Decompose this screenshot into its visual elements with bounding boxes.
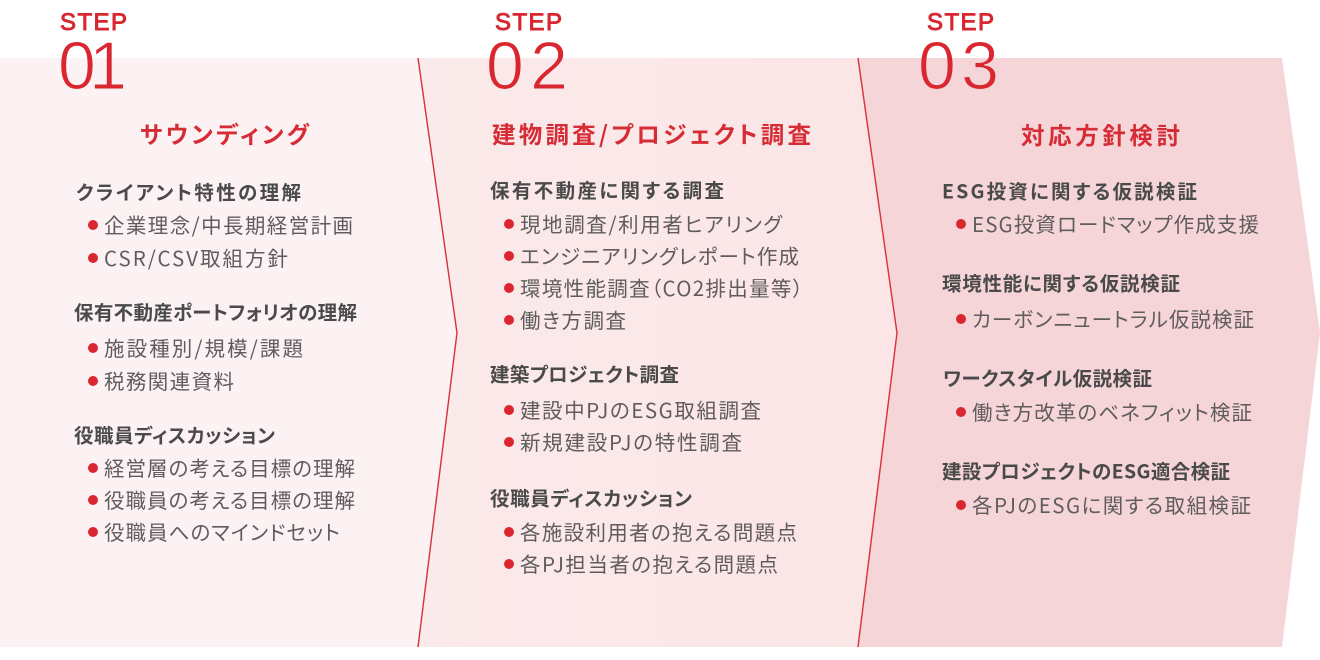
- step 1 label: STEP: [60, 9, 127, 36]
- step 1 group: discussion: 役職員へのマインドセット: [104, 516, 340, 546]
- step 1 group: discussion: [74, 420, 355, 546]
- step 2 group: real estate survey: 環境性能調査（CO2排出量等）: [520, 272, 803, 302]
- panel: step 3 background arrow: [820, 58, 1320, 647]
- step 2 group: discussion: 各施設利用者の抱える問題点: [520, 516, 797, 546]
- step 2 title: 建物調査/プロジェクト調査: [492, 116, 811, 150]
- arrow: divider between step 1 and 2: [418, 58, 457, 647]
- step 1 group: portfolio: 税務関連資料: [104, 365, 234, 395]
- step 3 group: work style: 働き方改革のベネフィット検証: [972, 396, 1252, 426]
- step 1 group: client: CSR/CSV取組方針: [104, 242, 288, 272]
- step 2 label: STEP: [495, 9, 562, 36]
- step 3 group: ESG investment: ESG投資ロードマップ作成支援: [972, 208, 1259, 238]
- step 2 group: real estate survey: [490, 174, 803, 334]
- step 3 group: work style: [943, 362, 1252, 426]
- step 1 group: client: 企業理念/中長期経営計画: [104, 209, 353, 239]
- step 2 group: project survey: 建設中PJのESG取組調査: [520, 394, 761, 424]
- step 3 group: project ESG: 建設プロジェクトのESG適合検証: [942, 456, 1230, 484]
- step 3 label: STEP: [927, 9, 994, 36]
- step 2 group: discussion: 役職員ディスカッション: [490, 482, 692, 512]
- panel: step 2 background arrow: [400, 58, 897, 647]
- step 1 group: portfolio: [74, 296, 357, 395]
- step 1 group: client: クライアント特性の理解: [76, 176, 301, 206]
- panel: step 3 content: [918, 9, 1259, 519]
- step 3 group: work style: ワークスタイル仮説検証: [943, 362, 1152, 392]
- step 1 group: discussion: 経営層の考える目標の理解: [104, 452, 355, 482]
- step 1 group: client: [76, 176, 353, 272]
- step 3 group: environmental performance: カーボンニュートラル仮説検証: [972, 303, 1254, 333]
- step 2 group: project survey: 建築プロジェクト調査: [490, 358, 679, 388]
- panel: step 2 content: [486, 9, 811, 578]
- arrow: divider between step 2 and 3: [858, 58, 897, 647]
- step 2 group: discussion: [490, 482, 797, 578]
- step 2 group: real estate survey: 現地調査/利用者ヒアリング: [520, 208, 783, 238]
- step 3 group: project ESG: 各PJのESGに関する取組検証: [972, 489, 1251, 519]
- step 1 group: portfolio: 施設種別/規模/課題: [104, 332, 303, 362]
- step 3 group: ESG investment: ESG投資に関する仮説検証: [942, 176, 1197, 204]
- panel: step 1 background arrow: [0, 58, 457, 647]
- panel: step 1 content: [58, 9, 357, 546]
- step 2 group: real estate survey: エンジニアリングレポート作成: [520, 240, 799, 270]
- step 3 group: project ESG: [942, 456, 1251, 519]
- step 2 group: project survey: 新規建設PJの特性調査: [520, 426, 742, 456]
- step 2 number: 02: [486, 28, 568, 104]
- step 1 group: portfolio: 保有不動産ポートフォリオの理解: [74, 296, 357, 326]
- step 3 number: 03: [918, 28, 999, 104]
- step 2 group: discussion: 各PJ担当者の抱える問題点: [520, 548, 778, 578]
- step 1 number: 01: [58, 28, 127, 104]
- step 2 group: real estate survey: 働き方調査: [520, 304, 626, 334]
- step 3 group: environmental performance: 環境性能に関する仮説検証: [942, 268, 1180, 296]
- step 1 group: discussion: 役職員ディスカッション: [74, 420, 275, 448]
- step 1 title: サウンディング: [140, 116, 310, 150]
- step 2 group: project survey: [490, 358, 761, 456]
- step 2 group: real estate survey: 保有不動産に関する調査: [490, 174, 724, 204]
- step 3 title: 対応方針検討: [1021, 117, 1180, 151]
- step 3 group: environmental performance: [942, 268, 1254, 333]
- step 1 group: discussion: 役職員の考える目標の理解: [104, 484, 355, 514]
- step 3 group: ESG investment: [942, 176, 1259, 238]
